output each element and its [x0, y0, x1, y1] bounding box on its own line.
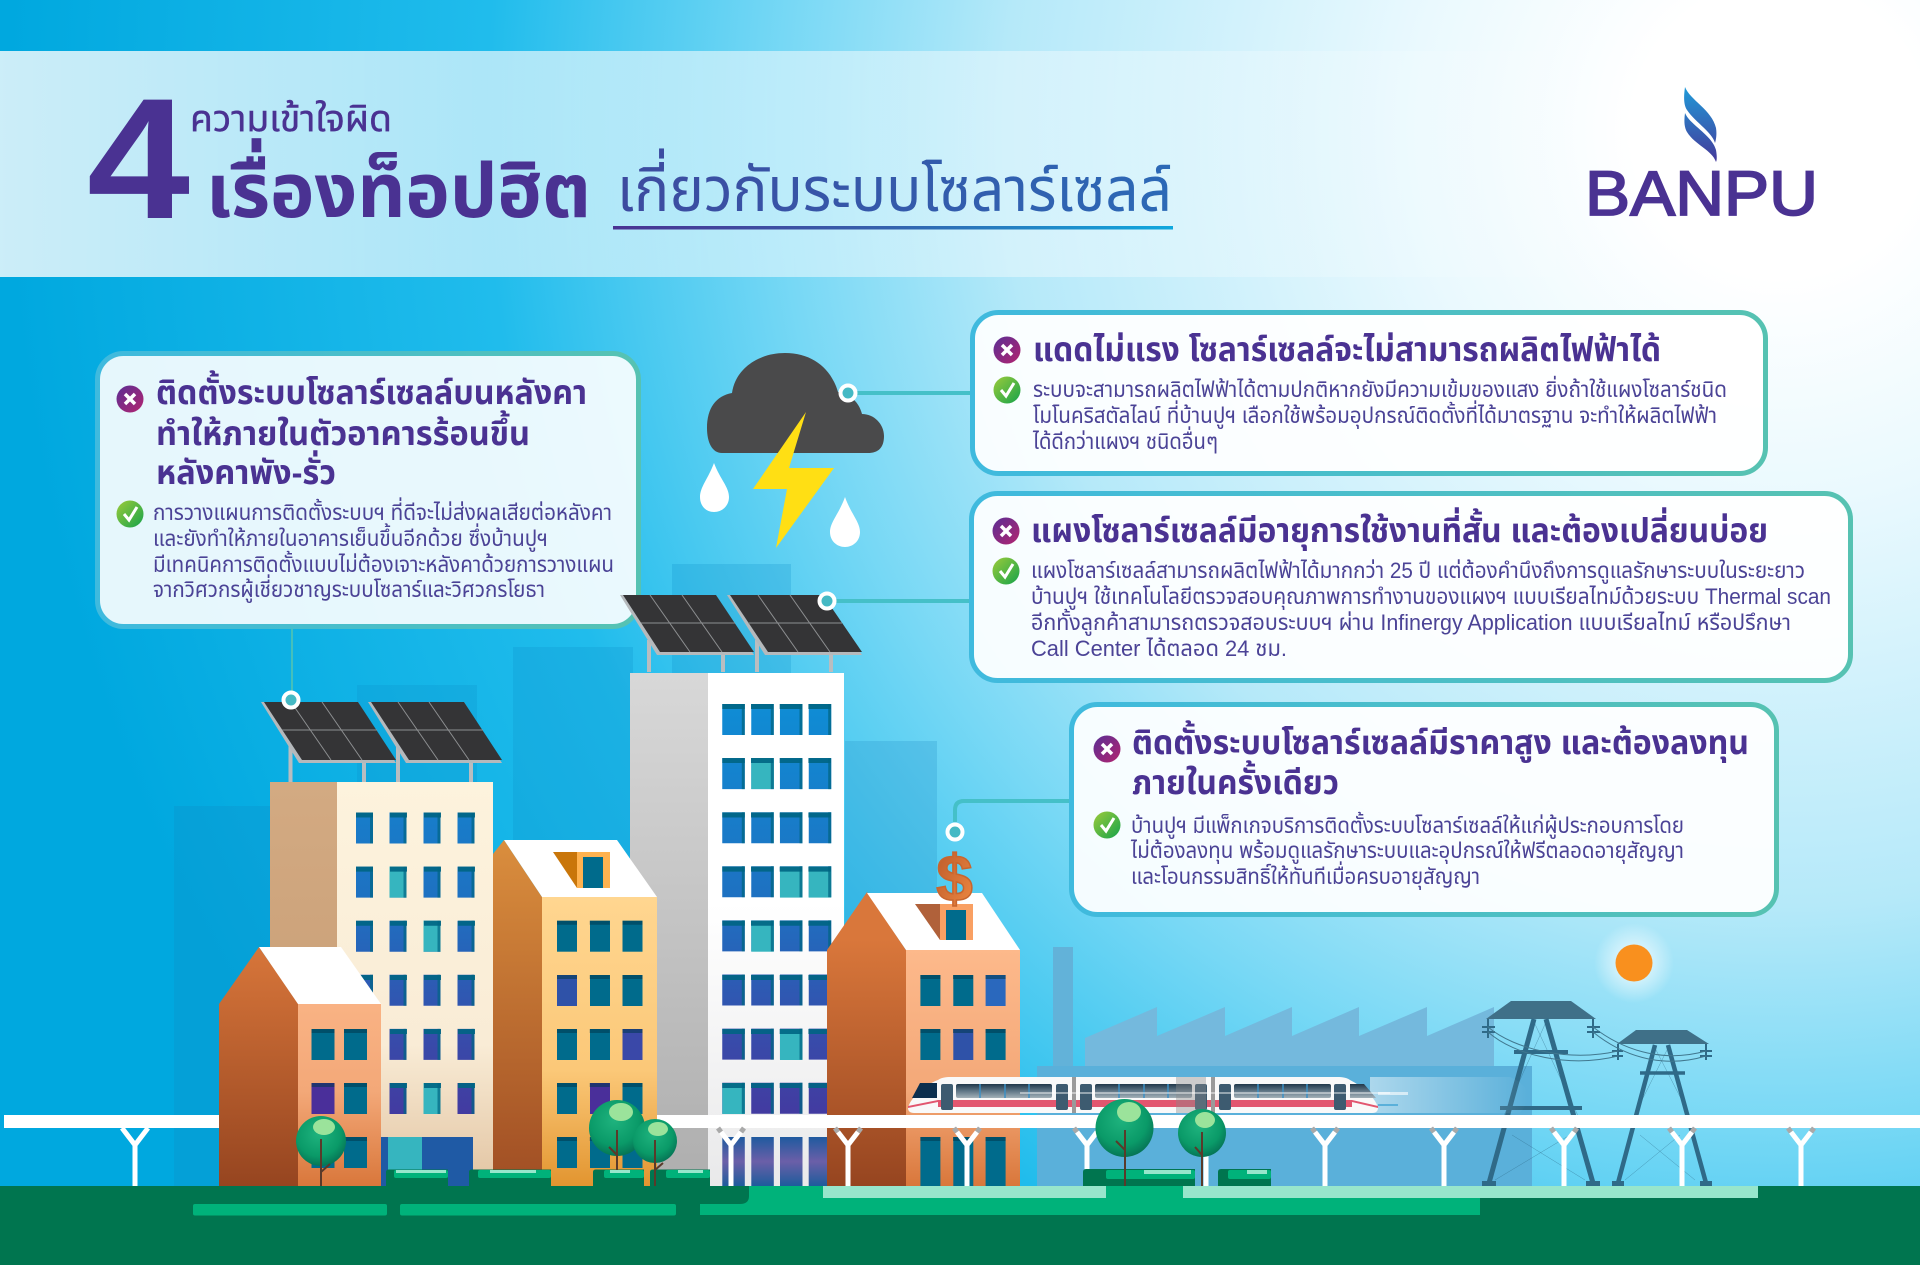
card 4 body text	[1130, 811, 1684, 890]
card 4 heading: ภายในครั้งเดียว	[1132, 760, 1339, 802]
title underline	[613, 226, 1173, 230]
icon: storm cloud	[700, 353, 884, 548]
tower window shading	[722, 704, 832, 1114]
card 2 body text	[1032, 375, 1727, 454]
card 4 body text: และโอนกรรมสิทธิ์ให้ทันทีเมื่อครบอายุสัญญา	[1131, 861, 1480, 890]
panel: card 2 weak sun myth	[972, 312, 1766, 474]
tower building	[630, 673, 844, 1186]
card 1 heading: หลังคาพัง-รั่ว	[156, 450, 336, 492]
icon: cross	[992, 518, 1020, 544]
shrubs	[386, 1169, 1271, 1186]
card 1 body text: มีเทคนิคการติดตั้งแบบไม่ต้องเจาะหลังคาด้วยการวางแผน	[153, 550, 614, 577]
panel: card 1 roof myth	[98, 354, 638, 626]
card 3 body text	[1031, 558, 1831, 661]
train red stripe	[908, 1100, 1378, 1108]
dormer	[553, 852, 577, 888]
orange house left	[219, 947, 381, 1186]
card 3 body text: บ้านปูฯ ใช้เทคโนโลยีตรวจสอบคุณภาพการทำงานของแผงฯ แบบเรียลไทม์ด้วยระบบ Thermal scan	[1031, 584, 1831, 611]
connector line: dollar to card 4	[955, 801, 1071, 822]
train doors	[941, 1084, 1346, 1110]
panel: card 4 cost myth	[1072, 704, 1776, 914]
card 1 body text: จากวิศวกรผู้เชี่ยวชาญระบบโซลาร์และวิศวกรโยธา	[153, 574, 545, 604]
tree 2	[589, 1100, 645, 1170]
card 3 body text: แผงโซลาร์เซลล์สามารถผลิตไฟฟ้าได้มากกว่า 25 ปี แต่ต้องคำนึงถึงการดูแลรักษาระบบในระยะยาว	[1031, 558, 1805, 585]
power tower: large	[1482, 1001, 1600, 1187]
left house windows	[312, 1029, 367, 1168]
rail pylons	[718, 1128, 1814, 1186]
ground	[0, 1186, 1920, 1265]
card 2 body text: ระบบจะสามารถผลิตไฟฟ้าได้ตามปกติหากยังมีความเข้มของแสง ยิ่งถ้าใช้แผงโซลาร์ชนิด	[1033, 375, 1727, 402]
marker: cloud	[840, 386, 856, 400]
icon: cross	[1094, 736, 1120, 762]
icon: flame	[1684, 87, 1717, 162]
card 2 heading: แดดไม่แรง โซลาร์เซลล์จะไม่สามารถผลิตไฟฟ้าได้	[1033, 332, 1661, 369]
elevated rail	[657, 1115, 1920, 1128]
right house windows	[920, 975, 1006, 1186]
marker: dollar	[948, 824, 962, 840]
entrance	[381, 1137, 473, 1186]
connector line: card 1 to left panels	[291, 629, 293, 691]
tree 1	[296, 1116, 346, 1186]
icon: check	[992, 558, 1020, 584]
card 4 heading: ติดตั้งระบบโซลาร์เซลล์มีราคาสูง และต้องลงทุน	[1132, 720, 1749, 763]
icon: cross	[116, 386, 144, 412]
background city silhouettes	[174, 564, 937, 1187]
card 1 body text: การวางแผนการติดตั้งระบบฯ ที่ดีจะไม่ส่งผลเสียต่อหลังคา	[153, 497, 612, 525]
card 4 body text: บ้านปูฯ มีแพ็กเกจบริการติดตั้งระบบโซลาร์เซลล์ให้แก่ผู้ประกอบการโดย	[1131, 811, 1684, 840]
card 1 heading: ติดตั้งระบบโซลาร์เซลล์บนหลังคา	[156, 370, 587, 412]
orange house right	[827, 892, 1020, 1186]
dormer	[915, 904, 940, 940]
lightning bolt	[753, 412, 834, 548]
title line: top hits: เรื่องท็อปฮิต	[206, 138, 591, 234]
card 1 heading	[156, 370, 587, 492]
cream building windows	[364, 812, 466, 1114]
yellow house	[493, 840, 657, 1186]
marker: tower panels	[820, 594, 834, 608]
number 4: 4	[87, 63, 190, 255]
logo: Banpu	[1585, 87, 1818, 229]
tower windows	[734, 704, 820, 1114]
tree 5	[1178, 1109, 1226, 1186]
icon: check	[1094, 812, 1120, 838]
solar panels: cream building	[261, 702, 502, 782]
connector line: panels to card 3	[836, 599, 971, 603]
tree 3	[633, 1119, 677, 1186]
rain drop left	[700, 463, 729, 512]
card 1 heading: ทำให้ภายในตัวอาคารร้อนขึ้น	[156, 410, 530, 453]
card 3 heading: แผงโซลาร์เซลล์มีอายุการใช้งานที่สั้น และต้องเปลี่ยนบ่อย	[1031, 507, 1768, 551]
train speed trail	[1370, 1077, 1528, 1113]
factory silhouette	[1037, 947, 1532, 1186]
train	[908, 1077, 1528, 1113]
title line: about solar: เกี่ยวกับระบบโซลาร์เซลล์	[617, 148, 1172, 225]
card 2 body text: ได้ดีกว่าแผงฯ ชนิดอื่นๆ	[1032, 426, 1218, 454]
card 1 body text: และยังทำให้ภายในอาคารเย็นขึ้นอีกด้วย ซึ่งบ้านปูฯ	[153, 523, 548, 553]
icon: check	[994, 376, 1020, 404]
panel: card 3 lifespan myth	[972, 494, 1850, 680]
logo wordmark: BANPU	[1585, 159, 1818, 229]
train body	[908, 1077, 1378, 1113]
rain drop right	[830, 497, 860, 547]
tree 4	[1096, 1099, 1154, 1186]
icon: cross	[994, 336, 1020, 364]
power tower: small	[1612, 1030, 1712, 1187]
connector line: cloud to card 2	[856, 391, 972, 395]
cloud	[707, 353, 884, 453]
yellow house windows	[557, 921, 642, 1168]
card 3 body text: Call Center ได้ตลอด 24 ชม.	[1031, 636, 1287, 661]
icon: dollar sign: $	[936, 841, 973, 915]
card 3 body text: อีกทั้งลูกค้าสามารถตรวจสอบระบบฯ ผ่าน Infinergy Application แบบเรียลไทม์ หรือปรึกษา	[1031, 608, 1791, 637]
card 4 heading	[1132, 720, 1749, 802]
icon: check	[116, 500, 144, 528]
power lines	[1488, 1027, 1706, 1061]
cream building	[270, 782, 493, 1186]
card 2 body text: โมโนคริสตัลไลน์ ที่บ้านปูฯ เลือกใช้พร้อมอุปกรณ์ติดตั้งที่ได้มาตรฐาน จะทำให้ผลิตไฟฟ้า	[1033, 400, 1717, 430]
card 4 body text: ไม่ต้องลงทุน พร้อมดูแลรักษาระบบและอุปกรณ์ให้ฟรีตลอดอายุสัญญา	[1130, 838, 1684, 865]
title line: misconceptions: ความเข้าใจผิด	[190, 98, 392, 139]
header band	[0, 51, 1920, 277]
solar panels: tower	[620, 595, 862, 672]
marker: left panels	[284, 692, 298, 708]
sun	[1594, 923, 1674, 1003]
card 1 body text	[153, 497, 614, 604]
rail left section	[4, 1115, 222, 1186]
train windows	[912, 1083, 937, 1098]
title	[87, 63, 1173, 255]
